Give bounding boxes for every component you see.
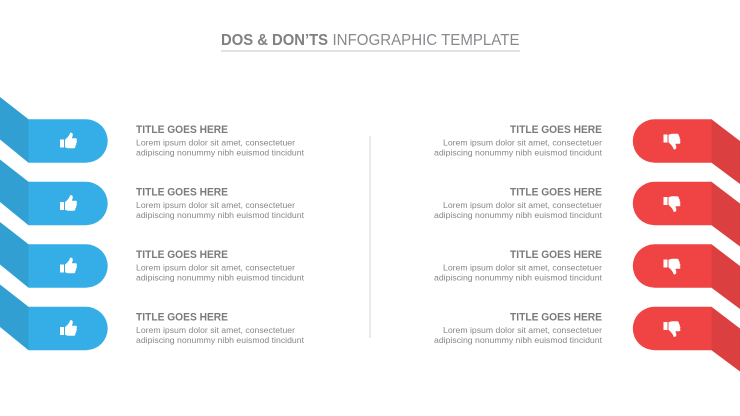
- don't item 1: TITLE GOES HERE: [510, 124, 602, 136]
- do item 4: adipiscing nonummy nibh euismod tincidunt: [136, 335, 305, 345]
- panel: don'ts column: [434, 119, 740, 372]
- don't item 3: adipiscing nonummy nibh euismod tincidunt: [434, 272, 603, 282]
- don't item 3: Lorem ipsum dolor sit amet, consectetuer: [443, 262, 602, 272]
- don't item 1: [434, 119, 740, 184]
- do item 4: [0, 284, 305, 350]
- don't item 2: TITLE GOES HERE: [510, 186, 602, 198]
- don't item 2: adipiscing nonummy nibh euismod tincidunt: [434, 210, 603, 220]
- do item 1: adipiscing nonummy nibh euismod tincidunt: [136, 148, 305, 158]
- do item 3: [0, 222, 305, 288]
- do item 1: TITLE GOES HERE: [136, 124, 228, 136]
- don't item 4: TITLE GOES HERE: [510, 312, 602, 324]
- do item 2: adipiscing nonummy nibh euismod tincidunt: [136, 210, 305, 220]
- center divider: [369, 136, 371, 338]
- don't item 4: [434, 307, 740, 372]
- do item 3: adipiscing nonummy nibh euismod tincidunt: [136, 272, 305, 282]
- do item 1: Lorem ipsum dolor sit amet, consectetuer: [136, 138, 295, 148]
- do item 2: [0, 160, 305, 225]
- panel: dos column: [0, 97, 305, 350]
- do item 4: TITLE GOES HERE: [136, 312, 228, 324]
- don't item 3: [434, 244, 740, 309]
- don't item 2: Lorem ipsum dolor sit amet, consectetuer: [443, 200, 602, 210]
- do item 4: Lorem ipsum dolor sit amet, consectetuer: [136, 325, 295, 335]
- title: INFOGRAPHIC TEMPLATE: [332, 32, 520, 49]
- don't item 4: Lorem ipsum dolor sit amet, consectetuer: [443, 325, 602, 335]
- do item 3: Lorem ipsum dolor sit amet, consectetuer: [136, 262, 295, 272]
- don't item 1: adipiscing nonummy nibh euismod tincidunt: [434, 148, 603, 158]
- don't item 3: TITLE GOES HERE: [510, 249, 602, 261]
- do item 2: TITLE GOES HERE: [136, 186, 228, 198]
- don't item 2: [434, 182, 740, 246]
- do item 2: Lorem ipsum dolor sit amet, consectetuer: [136, 200, 295, 210]
- title: [221, 32, 520, 51]
- don't item 4: adipiscing nonummy nibh euismod tincidunt: [434, 335, 603, 345]
- do item 1: [0, 97, 305, 163]
- do item 3: TITLE GOES HERE: [136, 249, 228, 261]
- don't item 1: Lorem ipsum dolor sit amet, consectetuer: [443, 138, 602, 148]
- title: DOS & DON’TS: [221, 32, 328, 49]
